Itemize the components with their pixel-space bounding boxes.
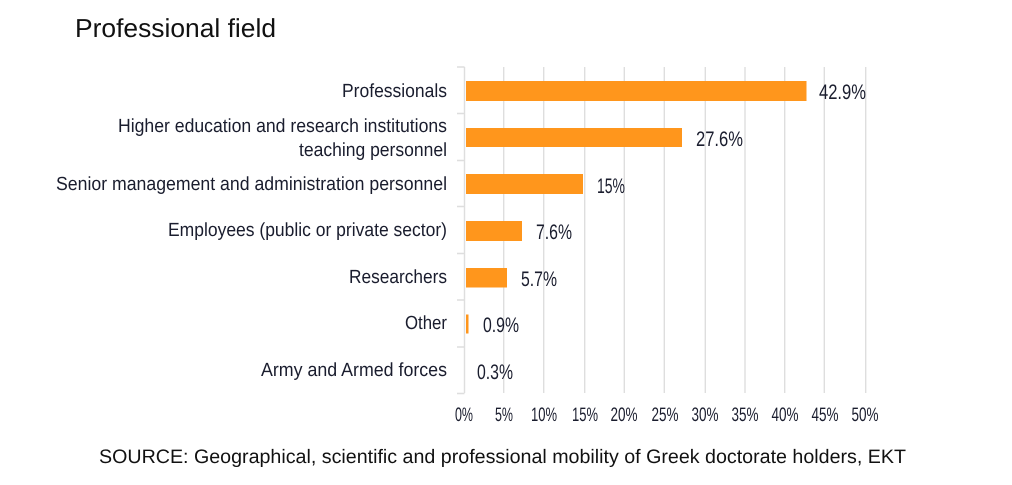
value labels: 0.3% (477, 361, 513, 384)
category labels: Other (405, 313, 448, 334)
category labels: Researchers (349, 267, 447, 288)
category labels: Senior management and administration personnel (56, 174, 447, 195)
value labels: 0.9% (483, 314, 519, 337)
title: Professional field (75, 13, 276, 43)
value labels: 5.7% (521, 268, 557, 291)
x axis labels: 0% (455, 404, 473, 426)
value labels: 27.6% (696, 128, 743, 151)
x axis labels (455, 404, 878, 426)
x axis labels: 15% (572, 404, 598, 426)
x axis labels: 50% (852, 404, 878, 426)
bar chart (56, 67, 878, 426)
x axis labels: 30% (692, 404, 718, 426)
x axis labels: 10% (531, 404, 557, 426)
value labels: 42.9% (819, 81, 866, 104)
source note: SOURCE: Geographical, scientific and professional mobility of Greek doctorate holders, EKT (99, 446, 906, 468)
category labels (56, 81, 448, 381)
category labels: teaching personnel (299, 140, 447, 161)
x axis labels: 5% (495, 404, 513, 426)
x axis labels: 35% (732, 404, 758, 426)
category labels: Employees (public or private sector) (168, 220, 447, 241)
value labels: 7.6% (536, 221, 572, 244)
x axis labels: 40% (772, 404, 798, 426)
category labels: Higher education and research institutions (118, 116, 447, 137)
x axis labels: 45% (812, 404, 838, 426)
category labels: Professionals (342, 81, 447, 102)
x axis labels: 20% (610, 404, 638, 426)
value labels: 15% (597, 175, 625, 198)
bars (466, 81, 806, 334)
value labels (477, 81, 866, 384)
category labels: Army and Armed forces (261, 360, 447, 381)
x axis labels: 25% (652, 404, 678, 426)
